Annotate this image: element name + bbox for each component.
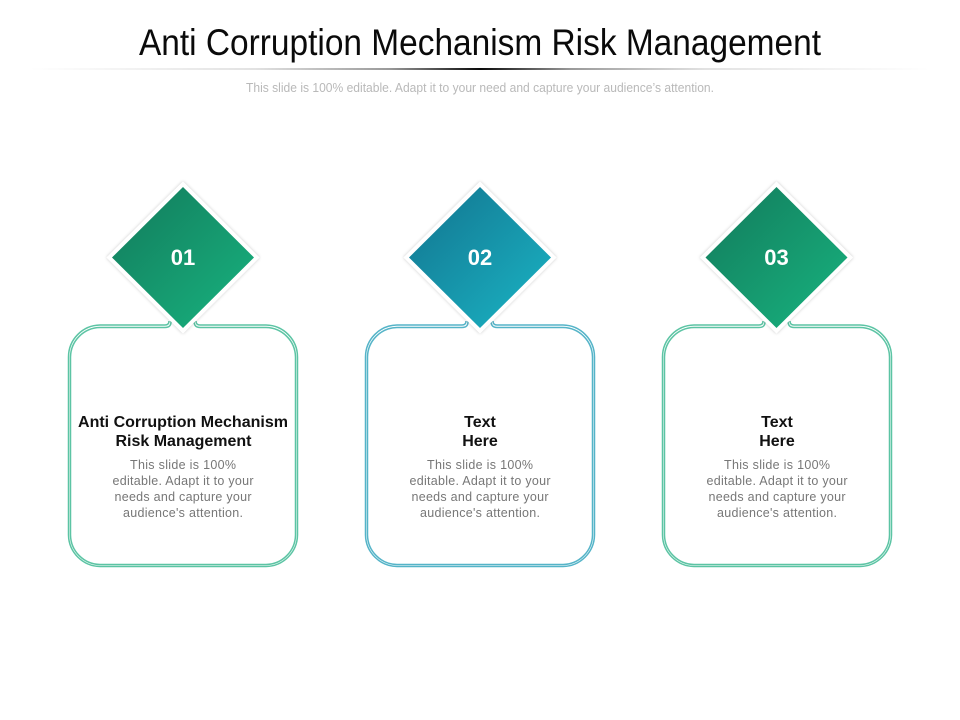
card 01 body: needs and capture your <box>114 490 252 504</box>
diamond 03: 03 <box>764 245 789 270</box>
card 03 body: This slide is 100% <box>724 458 830 472</box>
card 03 body: editable. Adapt it to your <box>706 474 848 488</box>
card 02 outline <box>366 321 594 566</box>
card 02 body: audience's attention. <box>420 506 540 520</box>
card 01 body: This slide is 100% <box>130 458 236 472</box>
card 03 heading: Text <box>761 414 794 431</box>
card 03 body: needs and capture your <box>708 490 846 504</box>
card 03 body: audience's attention. <box>717 506 837 520</box>
diamond 03 <box>700 182 853 334</box>
diamond 01: 01 <box>171 245 195 270</box>
card 03 outline <box>662 321 892 566</box>
diamond 02: 02 <box>468 245 492 270</box>
card 01 body: editable. Adapt it to your <box>112 474 254 488</box>
card 02 body: needs and capture your <box>412 490 548 504</box>
card 01 body: audience's attention. <box>123 506 243 520</box>
title divider <box>30 68 930 70</box>
panel: card 03 <box>662 182 892 566</box>
card 02 heading: Here <box>462 433 498 450</box>
card 02 heading: Text <box>464 414 497 431</box>
panel: card 01 <box>68 182 298 566</box>
diamond 01 <box>106 182 260 334</box>
diamond 02 <box>404 182 556 334</box>
title: Anti Corruption Mechanism Risk Management <box>139 22 822 63</box>
card 02 body: This slide is 100% <box>427 458 533 472</box>
subtitle: This slide is 100% editable. Adapt it to your need and capture your audience’s attention. <box>246 80 714 95</box>
card 02 body: editable. Adapt it to your <box>410 474 550 488</box>
card 03 heading: Here <box>759 433 795 450</box>
card 01 heading: Anti Corruption Mechanism <box>78 414 288 431</box>
panel: card 02 <box>366 182 594 566</box>
card 01 outline <box>68 321 298 566</box>
card 01 heading: Risk Management <box>115 433 252 450</box>
